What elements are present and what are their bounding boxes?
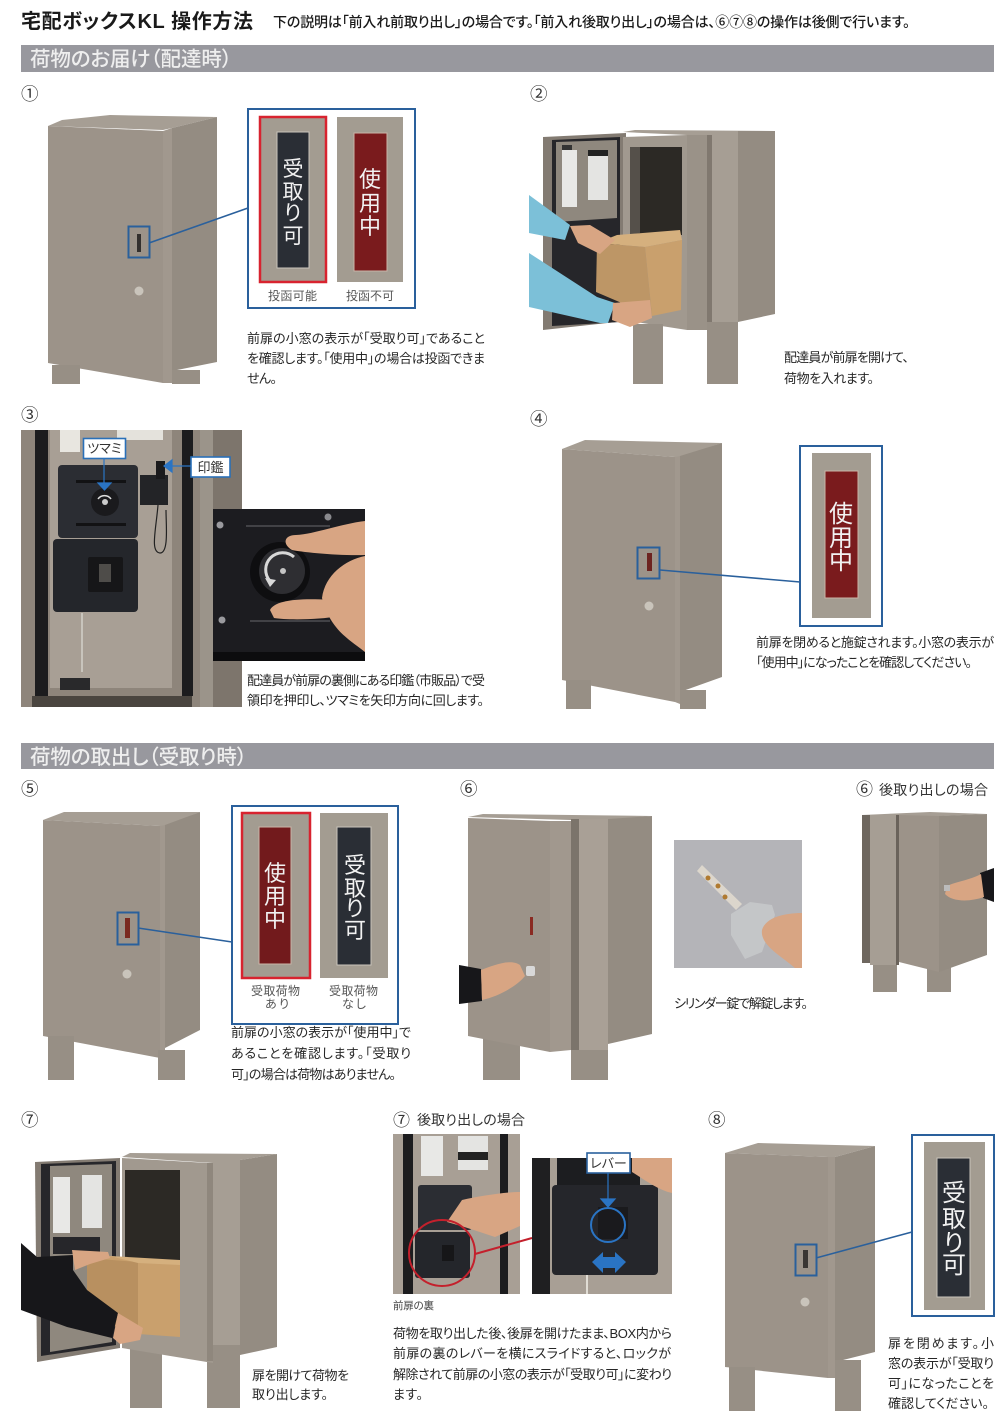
step 2 text: 配達員が前扉を開けて、 [784, 350, 909, 365]
upper lock [58, 465, 138, 538]
seal holder [140, 461, 168, 553]
step 7 text [252, 1368, 349, 1402]
label: seal: 印鑑 [197, 460, 224, 475]
step 8 text: 可」になったことを [888, 1376, 994, 1391]
window and highlight [128, 226, 150, 258]
subtitle note: 下の説明は「前入れ前取り出し」の場合です。「前入れ後取り出し」の場合は、⑥⑦⑧の操作は後側で行います。 [273, 14, 910, 30]
step 5 text: 前扉の小窓の表示が「使用中」で [231, 1025, 412, 1040]
parcel [596, 230, 682, 316]
lever label [587, 1153, 630, 1173]
section heading: pickup [21, 743, 994, 769]
step 8 text: 窓の表示が「受取り [888, 1356, 994, 1371]
step 6 text: シリンダー錠で解錠します。 [674, 996, 808, 1011]
step 7 rear text: ます。 [393, 1387, 423, 1402]
callout: in use window: 使用中 [829, 501, 853, 575]
section heading: delivery [21, 45, 994, 72]
connector line step 1 [149, 208, 248, 243]
panel: step 1 box illustration [48, 115, 217, 384]
step 4 text [756, 635, 994, 670]
step 2 number: ② [530, 84, 548, 104]
step 8 text [888, 1336, 994, 1411]
panel: step 3 door inside photo [21, 430, 242, 707]
lower lock [53, 539, 138, 612]
step 3 text: 領印を押印し、ツマミを矢印方向に回します。 [247, 693, 484, 708]
callout: window states step 1 [248, 109, 415, 308]
step 2 text [784, 350, 909, 386]
step 5 text: 可」の場合は荷物はありません。 [231, 1067, 396, 1082]
red connector [475, 1238, 532, 1254]
step 8 text: 確認してください。 [888, 1396, 989, 1411]
hand with key [459, 962, 535, 1004]
arrow to knob [98, 458, 111, 490]
step 6 rear heading [856, 780, 988, 799]
title: 宅配ボックスKL 操作方法 [21, 10, 253, 33]
parcel [87, 1256, 180, 1337]
blue highlight circle [591, 1208, 625, 1242]
label: seal [191, 457, 230, 477]
delivery person arms [529, 195, 652, 327]
step 1 text: を確認します。「使用中」の場合は投函できま [247, 351, 485, 366]
step 6 number: ⑥ [460, 779, 478, 799]
step 2 text: 荷物を入れます。 [784, 371, 874, 386]
person arms [21, 1243, 143, 1344]
panel: step 8 closed box [725, 1143, 875, 1411]
hand [944, 868, 994, 902]
callout: window states step 5: 受取荷物 [329, 984, 378, 998]
step 7 rear text: 解除されて前扉の小窓の表示が「受取り可」に変わり [393, 1367, 672, 1382]
step 3 text: 配達員が前扉の裏側にある印鑑（市販品）で受 [247, 673, 485, 688]
callout: window states step 5: 使用中 [264, 861, 286, 932]
callout: window states step 5: 受取り可 [344, 853, 366, 943]
step 7 rear text [393, 1326, 672, 1402]
callout: window states step 5: なし [342, 997, 366, 1011]
panel: step 2 open box with parcel [529, 130, 775, 384]
caption: back of front door: 前扉の裏 [393, 1299, 434, 1312]
callout: window states step 5: 受取荷物 [251, 984, 300, 998]
step 3 text [247, 673, 485, 708]
step 7 rear text: 荷物を取り出した後、後扉を開けたまま、BOX内から [393, 1326, 672, 1341]
step 1 text [247, 331, 485, 386]
step 3 number: ③ [21, 405, 38, 425]
step 7 rear heading: 後取り出しの場合 [417, 1112, 525, 1128]
step 4 text: 前扉を閉めると施錠されます。小窓の表示が [756, 635, 994, 650]
photo: key [674, 840, 802, 968]
callout: window states step 1: 受取り可 [282, 158, 304, 248]
step 7 rear heading [393, 1111, 525, 1130]
callout: window states step 1: 投函不可 [346, 288, 394, 303]
step 4 number: ④ [530, 409, 548, 429]
callout: in use window [800, 446, 882, 626]
step 7 text: 扉を開けて荷物を [252, 1368, 349, 1383]
section heading: pickup: 荷物の取出し（受取り時） [30, 746, 247, 769]
panel: step 6 unlocking front [459, 814, 652, 1080]
callout: available window [912, 1135, 994, 1316]
connector line step 4 [660, 570, 800, 582]
panel: step 6 rear box [862, 812, 994, 992]
step 6 rear heading: ⑥ [856, 780, 873, 799]
inset: turning the knob [213, 509, 365, 661]
step 7 text: 取り出します。 [252, 1387, 328, 1402]
red highlight circle [409, 1220, 475, 1286]
label: knob: ツマミ [87, 441, 122, 456]
label: knob [84, 438, 126, 458]
step 7 number: ⑦ [21, 1110, 38, 1130]
connector line step 5 [138, 928, 232, 942]
step 5 text: あることを確認します。「受取り [231, 1046, 411, 1061]
step 1 text: 前扉の小窓の表示が「受取り可」であること [247, 331, 485, 346]
step 8 text: 扉を閉めます。小 [888, 1336, 994, 1351]
callout: window states step 5 [232, 806, 398, 1024]
callout: window states step 1: 使用中 [359, 167, 381, 239]
slide arrow [592, 1252, 626, 1273]
step 1 text: せん。 [247, 371, 277, 386]
step 7 rear heading: ⑦ [393, 1111, 410, 1130]
panel: step 7 removing parcel [21, 1153, 277, 1408]
callout: available window: 受取り可 [942, 1180, 966, 1279]
step 7 rear text: 前扉の裏のレバーを横にスライドすると、ロックが [393, 1346, 671, 1361]
connector line step 8 [816, 1232, 912, 1258]
step 5 number: ⑤ [21, 779, 38, 799]
arrow to lever [601, 1173, 615, 1207]
step 8 number: ⑧ [708, 1110, 726, 1130]
callout: window states step 5: あり [265, 997, 289, 1011]
panel: step 4 closed box [562, 440, 722, 709]
section heading: delivery: 荷物のお届け（配達時） [30, 48, 232, 71]
step 5 text [231, 1025, 412, 1082]
callout: window states step 1: 投函可能 [268, 288, 317, 303]
photo: lever close-up [532, 1153, 672, 1294]
step 4 text: 「使用中」になったことを確認してください。 [756, 655, 972, 670]
panel: step 5 box [43, 812, 200, 1080]
step 1 number: ① [21, 84, 38, 104]
step 6 rear heading: 後取り出しの場合 [879, 782, 988, 798]
photo: rear door inside [393, 1134, 520, 1294]
arrow to seal [164, 460, 191, 472]
lever label: レバー [590, 1156, 627, 1171]
